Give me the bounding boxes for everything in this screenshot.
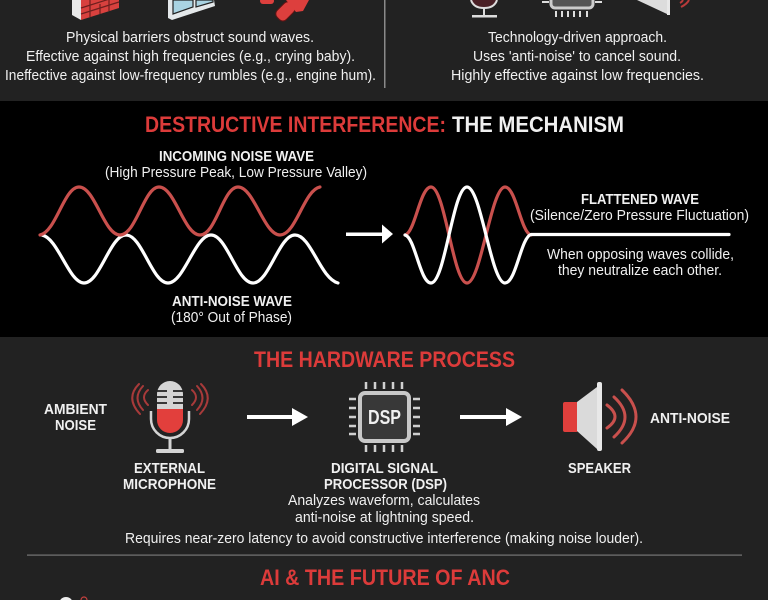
heading: destructive interference: DESTRUCTIVE INTERFERENCE: (145, 112, 446, 137)
text: latency note: Requires near-zero latency to avoid constructive interference (making noise louder). (125, 530, 643, 547)
label: anti-noise wave: (180° Out of Phase) (171, 309, 292, 326)
text: active description: Uses 'anti-noise' to cancel sound. (473, 48, 681, 65)
heading: hardware process: THE HARDWARE PROCESS (254, 347, 515, 372)
label: ambient noise: AMBIENT (44, 401, 107, 418)
label: external microphone: EXTERNAL (134, 460, 205, 477)
text: active description: Highly effective against low frequencies. (451, 67, 704, 84)
arrow: DSP to speaker (460, 408, 522, 426)
chart: incoming red wave (40, 187, 320, 235)
chart: anti-noise white wave (42, 235, 338, 283)
label: digital signal processor: DIGITAL SIGNAL (331, 460, 438, 477)
icon: DSP chip: DSP (368, 407, 401, 429)
panel: AI and the future of ANC (59, 565, 510, 600)
label: digital signal processor (288, 460, 480, 526)
text: active description: Technology-driven approach. (488, 29, 667, 46)
text: waves neutralize (547, 246, 734, 279)
label: speaker: SPEAKER (568, 460, 631, 477)
label: digital signal processor: PROCESSOR (DSP) (324, 476, 447, 493)
label: external microphone: MICROPHONE (123, 476, 216, 493)
label: ambient noise: NOISE (55, 417, 96, 434)
label: incoming noise wave: (High Pressure Peak, Low Pressure Valley) (105, 164, 367, 181)
label: anti-noise wave: ANTI-NOISE WAVE (172, 293, 292, 310)
icon: speaker (637, 0, 689, 15)
text: passive description: Physical barriers obstruct sound waves. (66, 29, 314, 46)
icon: external microphone (132, 381, 208, 453)
label: incoming noise wave: INCOMING NOISE WAVE (159, 148, 314, 165)
arrow: microphone to DSP (247, 408, 308, 426)
label: digital signal processor: anti-noise at lightning speed. (295, 509, 474, 526)
panel: hardware process (44, 347, 730, 547)
text: waves neutralize: they neutralize each other. (558, 262, 722, 279)
icon: speaker (563, 382, 636, 451)
icon: microphone (471, 0, 497, 18)
heading: destructive interference: THE MECHANISM (452, 112, 624, 137)
icon: window (168, 0, 215, 20)
icon: red earplug (260, 0, 309, 23)
text: passive description: Effective against high frequencies (e.g., crying baby). (26, 48, 355, 65)
label: flattened wave: (Silence/Zero Pressure Fluctuation) (530, 207, 749, 224)
icon: DSP chip (349, 382, 420, 452)
heading: AI and the future: AI & THE FUTURE OF ANC (260, 565, 510, 590)
chart: collision red wave (405, 187, 531, 283)
text: waves neutralize: When opposing waves collide, (547, 246, 734, 263)
icon: brick wall (72, 0, 119, 20)
text: passive description: Ineffective against low-frequency rumbles (e.g., engine hum). (5, 67, 376, 84)
panel: destructive interference (0, 101, 768, 337)
label: flattened wave (530, 191, 749, 224)
label: external microphone (123, 460, 216, 493)
label: incoming noise wave (105, 148, 367, 181)
label: anti-noise wave (171, 293, 292, 326)
chart: collision white wave and flat line (405, 187, 729, 283)
text: active description (451, 29, 704, 84)
icon: DSP chip (542, 0, 602, 17)
panel: active noise cancellation (451, 0, 704, 84)
text: passive description (5, 29, 376, 84)
label: ambient noise (44, 401, 107, 434)
icon: AI head partial (59, 597, 87, 600)
label: anti-noise output: ANTI-NOISE (650, 410, 730, 427)
label: flattened wave: FLATTENED WAVE (581, 191, 699, 208)
label: digital signal processor: Analyzes waveform, calculates (288, 492, 480, 509)
arrow: waves combine (346, 224, 393, 244)
panel: passive noise control (5, 0, 376, 84)
